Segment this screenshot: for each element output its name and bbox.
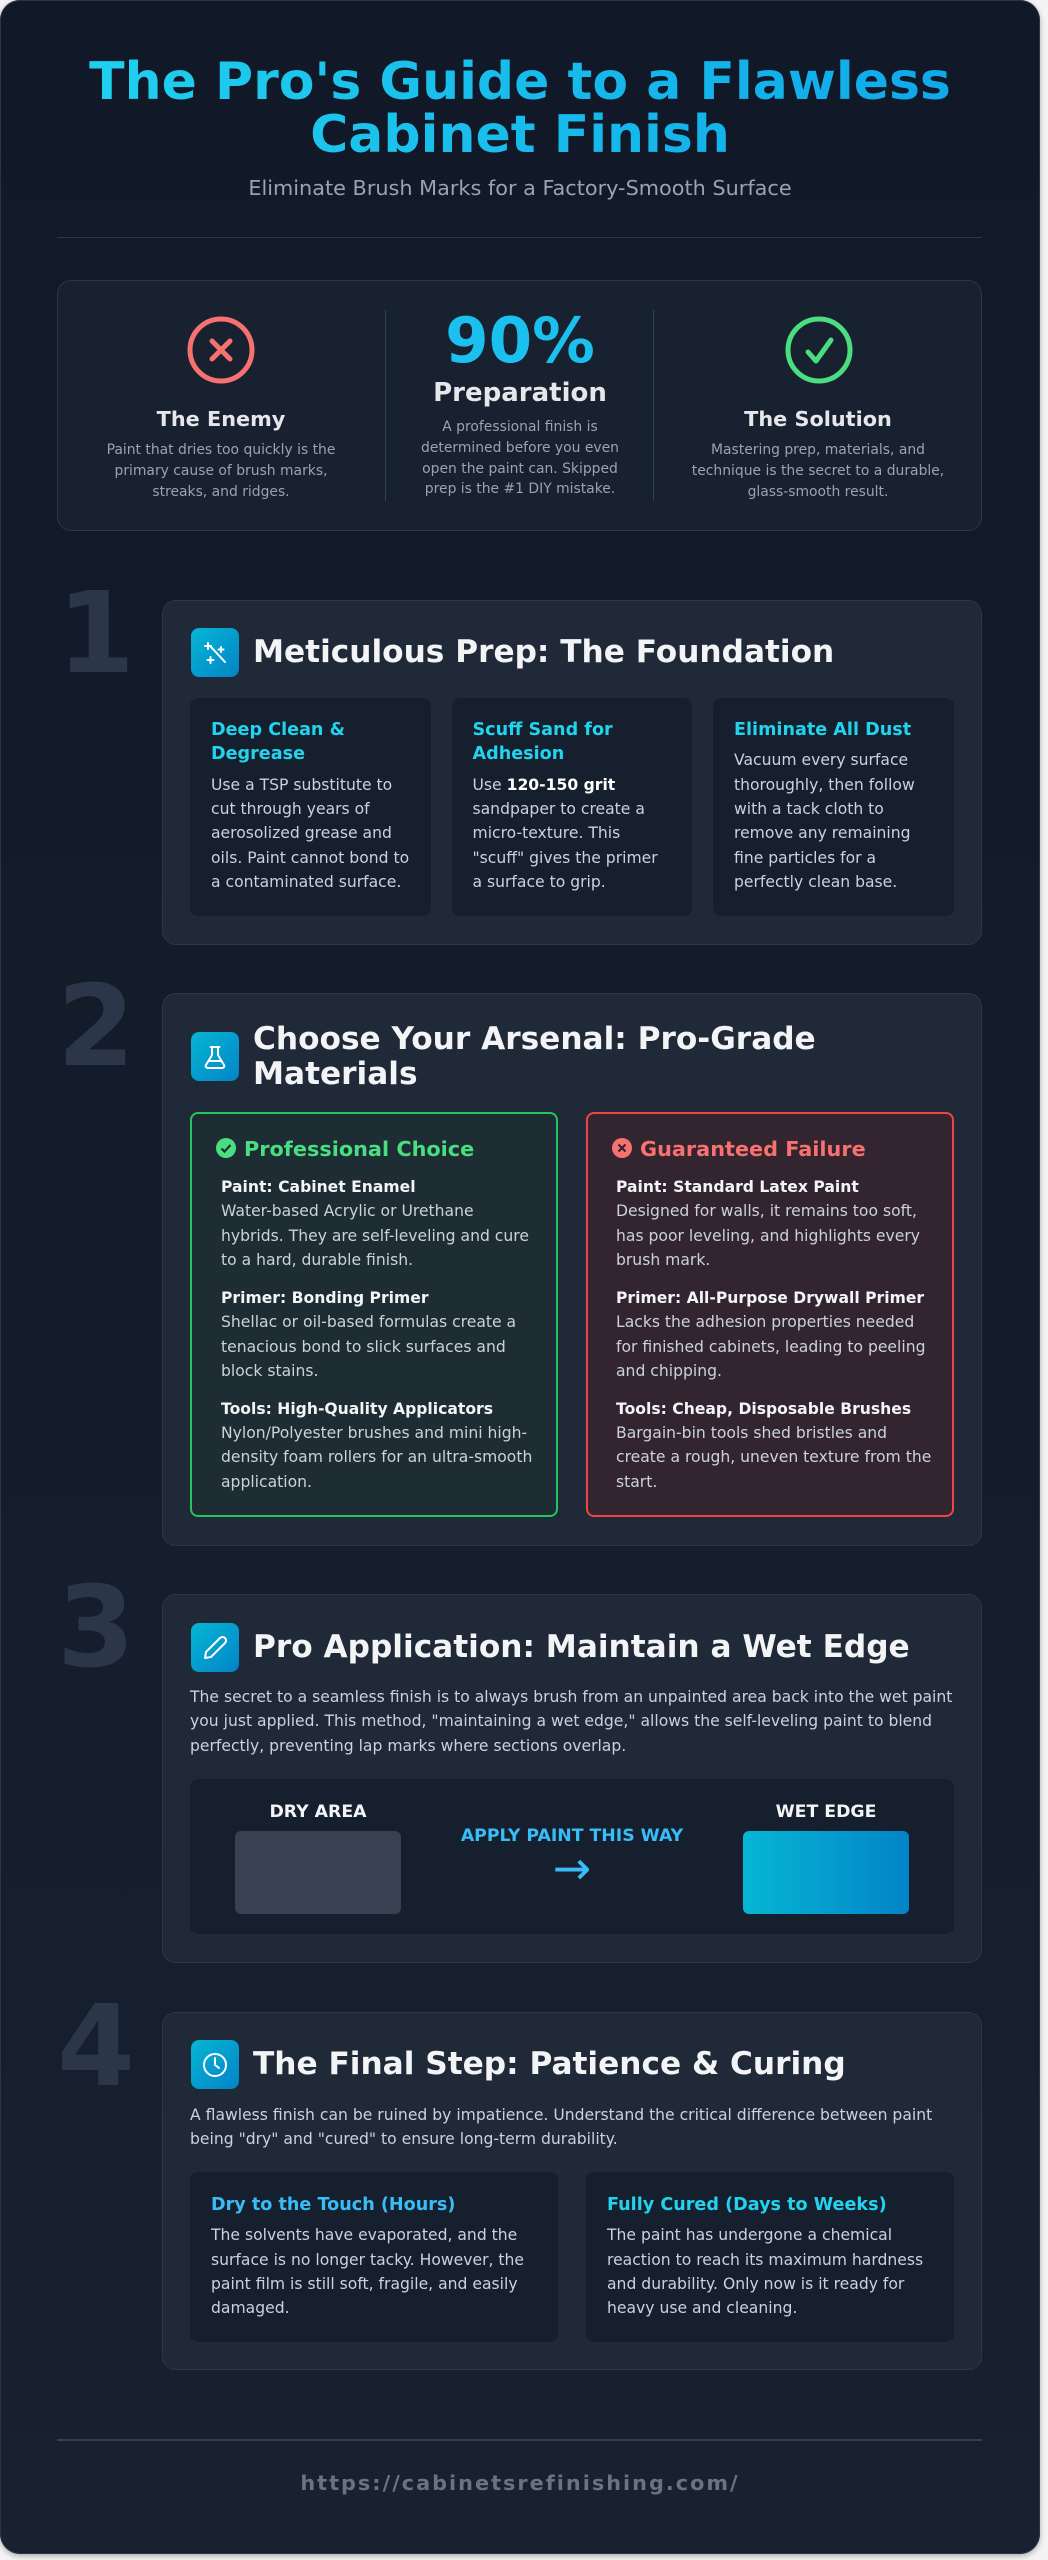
card: deep clean: Use a TSP substitute to [211, 776, 392, 794]
card: professional choice: density foam rollers for an ultra-smooth [221, 1448, 532, 1466]
title [0, 56, 1040, 162]
heading: Pro Application: Maintain a Wet Edge [253, 1628, 910, 1664]
heading: Materials [253, 1056, 418, 1092]
card: eliminate dust: thoroughly, then follow [734, 776, 915, 794]
label: wet edge: WET EDGE [776, 1802, 876, 1822]
stat: 90% preparation: determined before you even [421, 440, 619, 456]
heading: The Final Step: Patience & Curing [253, 2046, 846, 2082]
card: dry to the touch: surface is no longer tacky. However, the [211, 2251, 524, 2269]
label: dry area: DRY AREA [269, 1802, 367, 1822]
text: the solution: technique is the secret to a durable, [692, 463, 944, 479]
paragraph: perfectly, preventing lap marks where sections overlap. [190, 1737, 626, 1755]
card: fully cured: The paint has undergone a chemical [607, 2226, 892, 2244]
card: dry to the touch [190, 2172, 558, 2342]
step number 1: 1 [57, 569, 135, 699]
card: scuff sand: sandpaper to create a [472, 800, 645, 818]
card: eliminate dust: with a tack cloth to [734, 800, 884, 818]
card: guaranteed failure: brush mark. [616, 1251, 710, 1269]
icon: pencil [190, 1623, 239, 1672]
paragraph: A flawless finish can be ruined by impatience. Understand the critical difference between paint [190, 2106, 932, 2124]
paragraph: you just applied. This method, "maintaining a wet edge," allows the self-leveling paint to blend [190, 1712, 932, 1730]
card: guaranteed failure: for finished cabinets, leading to peeling [616, 1338, 925, 1356]
label: apply paint this way: APPLY PAINT THIS WAY [461, 1826, 683, 1846]
heading: Choose Your Arsenal: Pro-Grade [253, 1021, 816, 1057]
card: scuff sand: Use 120-150 grit [472, 776, 615, 794]
card: dry to the touch: The solvents have evaporated, and the [211, 2226, 517, 2244]
card: fully cured [586, 2172, 954, 2342]
card: dry to the touch: Dry to the Touch (Hours) [211, 2195, 455, 2215]
card: guaranteed failure: start. [616, 1473, 657, 1491]
stat: 90% preparation: Preparation [433, 378, 607, 408]
card: professional choice: Shellac or oil-based formulas create a [221, 1313, 516, 1331]
icon: check [216, 1138, 236, 1158]
card: scuff sand: micro-texture. This [472, 824, 620, 842]
footer url: https://cabinetsrefinishing.com/ [300, 2471, 740, 2495]
card: deep clean: Deep Clean & [211, 720, 345, 740]
text: the enemy [107, 407, 335, 500]
text: the solution [692, 407, 944, 500]
icon: solution check circle [786, 316, 852, 384]
card: professional choice: Nylon/Polyester brushes and mini high- [221, 1424, 527, 1442]
card: deep clean: oils. Paint cannot bond to [211, 849, 409, 867]
card: fully cured: and durability. Only now is it ready for [607, 2275, 904, 2293]
card: professional choice: Tools: High-Quality Applicators [221, 1400, 493, 1418]
card: dry to the touch: damaged. [211, 2299, 290, 2317]
card: guaranteed failure: and chipping. [616, 1362, 722, 1380]
icon: cross [612, 1138, 632, 1158]
panel: meticulous prep [162, 600, 982, 945]
title: Cabinet Finish [310, 105, 730, 165]
card: guaranteed failure: Primer: All-Purpose Drywall Primer [616, 1289, 924, 1307]
card: scuff sand: Adhesion [472, 744, 564, 764]
stat: 90% preparation: 90% [445, 304, 595, 377]
box: wet edge [743, 1831, 909, 1914]
diagram: wet edge [190, 1779, 954, 1934]
card: dry to the touch: paint film is still soft, fragile, and easily [211, 2275, 518, 2293]
panel: summary [57, 280, 982, 531]
stat: 90% preparation [421, 304, 619, 497]
heading: Meticulous Prep: The Foundation [253, 634, 834, 670]
panel: curing [162, 2012, 982, 2370]
card: guaranteed failure: Bargain-bin tools shed bristles and [616, 1424, 887, 1442]
stat: 90% preparation: open the paint can. Skipped [422, 461, 618, 477]
text: the solution: The Solution [744, 407, 892, 431]
card: deep clean: cut through years of [211, 800, 370, 818]
card: professional choice [190, 1112, 558, 1517]
card: scuff sand: Scuff Sand for [472, 720, 613, 740]
card: guaranteed failure: Tools: Cheap, Disposable Brushes [616, 1400, 911, 1418]
card: professional choice: Paint: Cabinet Enamel [221, 1178, 416, 1196]
card: guaranteed failure: create a rough, uneven texture from the [616, 1448, 931, 1466]
text: the solution: glass-smooth result. [748, 484, 888, 500]
card: fully cured: reaction to reach its maximum hardness [607, 2251, 923, 2269]
card: guaranteed failure: Lacks the adhesion properties needed [616, 1313, 914, 1331]
card: fully cured: heavy use and cleaning. [607, 2299, 797, 2317]
card: eliminate dust: Eliminate All Dust [734, 720, 911, 740]
card: professional choice: Professional Choice [244, 1137, 474, 1161]
card: professional choice: Primer: Bonding Primer [221, 1289, 429, 1307]
card: professional choice: to a hard, durable finish. [221, 1251, 413, 1269]
text: the enemy: primary cause of brush marks, [115, 463, 327, 479]
card: guaranteed failure: Paint: Standard Latex Paint [616, 1178, 859, 1196]
card: professional choice: Water-based Acrylic or Urethane [221, 1202, 474, 1220]
heading [253, 1021, 816, 1092]
card: deep clean: a contaminated surface. [211, 873, 401, 891]
icon: wand [190, 628, 239, 677]
paragraph [190, 1688, 952, 1755]
step number 4: 4 [57, 1982, 135, 2112]
title: The Pro's Guide to a Flawless [89, 52, 951, 112]
box: dry area [235, 1831, 401, 1914]
card: deep clean: aerosolized grease and [211, 824, 392, 842]
card: scuff sand: a surface to grip. [472, 873, 606, 891]
card: guaranteed failure [586, 1112, 954, 1517]
card: eliminate dust: fine particles for a [734, 849, 876, 867]
card: scuff sand: "scuff" gives the primer [472, 849, 658, 867]
card: professional choice: tenacious bond to slick surfaces and [221, 1338, 506, 1356]
paragraph [190, 2106, 932, 2148]
icon: clock [190, 2040, 239, 2089]
panel: application [162, 1594, 982, 1963]
card: professional choice: hybrids. They are self-leveling and cure [221, 1227, 529, 1245]
panel: arsenal [162, 993, 982, 1546]
card: professional choice: application. [221, 1473, 312, 1491]
text: the enemy: streaks, and ridges. [152, 484, 290, 500]
step number 3: 3 [57, 1563, 135, 1693]
card: guaranteed failure: has poor leveling, and highlights every [616, 1227, 920, 1245]
card: deep clean [190, 698, 431, 916]
text: the enemy: Paint that dries too quickly is the [107, 442, 335, 458]
card: scuff sand [452, 698, 692, 916]
arrow: → [553, 1841, 591, 1895]
card: professional choice: block stains. [221, 1362, 318, 1380]
paragraph: The secret to a seamless finish is to always brush from an unpainted area back into the wet paint [190, 1688, 952, 1706]
stat: 90% preparation: prep is the #1 DIY mistake. [425, 481, 615, 497]
card: fully cured: Fully Cured (Days to Weeks) [607, 2195, 887, 2215]
icon: enemy cross circle [188, 316, 254, 384]
text: the enemy: The Enemy [157, 407, 285, 431]
card: eliminate dust: remove any remaining [734, 824, 911, 842]
paragraph: being "dry" and "cured" to ensure long-term durability. [190, 2130, 618, 2148]
card: guaranteed failure: Guaranteed Failure [640, 1137, 866, 1161]
card: eliminate dust [713, 698, 954, 916]
card: deep clean: Degrease [211, 744, 305, 764]
step number 2: 2 [57, 962, 135, 1092]
subtitle: Eliminate Brush Marks for a Factory-Smooth Surface [248, 176, 792, 200]
card: eliminate dust: Vacuum every surface [734, 751, 908, 769]
card: guaranteed failure: Designed for walls, it remains too soft, [616, 1202, 917, 1220]
icon: flask [190, 1032, 239, 1081]
stat: 90% preparation: A professional finish is [442, 419, 598, 435]
text: the solution: Mastering prep, materials, and [711, 442, 925, 458]
card: eliminate dust: perfectly clean base. [734, 873, 897, 891]
